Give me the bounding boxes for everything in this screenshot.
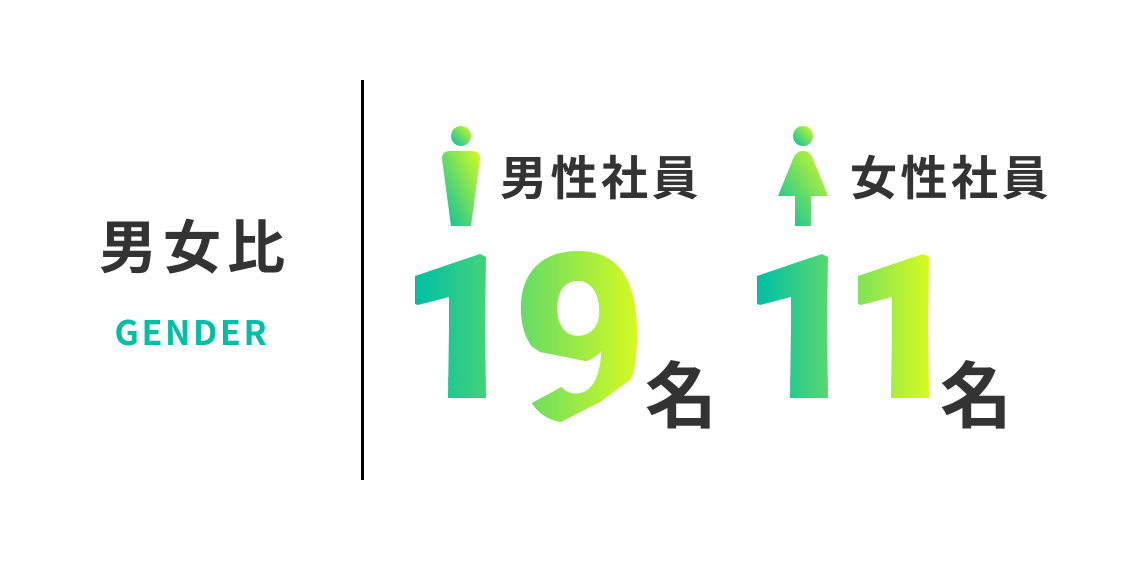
unit: 名: 名 — [940, 358, 1012, 438]
number: 19: 1 — [409, 214, 522, 442]
number: 11: 1 — [852, 214, 965, 442]
number: 11 — [757, 254, 929, 398]
vertical divider — [361, 80, 364, 480]
number: 19: 9 — [515, 204, 644, 470]
unit: 名: 名 — [645, 358, 717, 438]
subheading: GENDER: GENDER — [114, 306, 269, 355]
icon: female figure — [778, 126, 828, 226]
heading: 男女比: 男女比 — [99, 216, 291, 281]
panel: female employees — [751, 126, 1052, 442]
infographic: gender ratio — [100, 80, 1048, 480]
panel: male employees — [415, 126, 710, 429]
number: 19 — [415, 251, 638, 422]
label: 女性社員: 女性社員 — [850, 152, 1052, 205]
number: 11: 1 — [751, 214, 864, 442]
icon: male figure — [442, 126, 480, 226]
label: 男性社員: 男性社員 — [500, 152, 702, 205]
